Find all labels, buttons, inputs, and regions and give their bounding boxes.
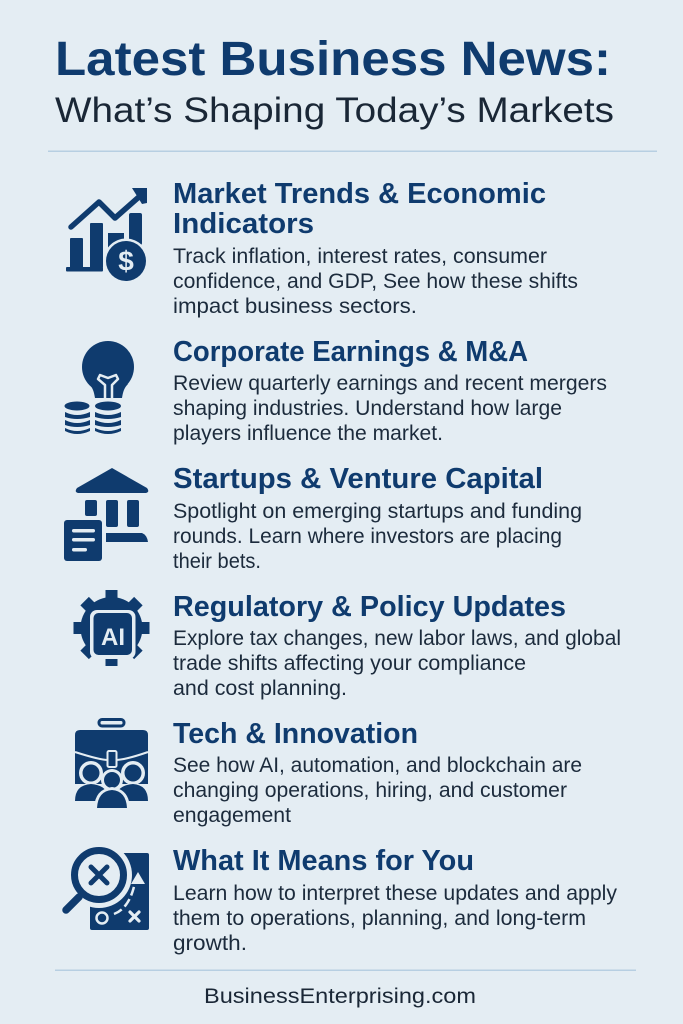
text block (173, 245, 578, 318)
text block: Spotlight on emerging startups and funding (173, 500, 582, 523)
text block: changing operations, hiring, and customer (173, 779, 567, 802)
text block (173, 627, 621, 700)
title: Latest Business News: (55, 33, 611, 86)
icon: AI gear: AI (101, 624, 125, 651)
text block: trade shifts affecting your compliance (173, 652, 526, 675)
text block: them to operations, planning, and long-term (173, 907, 586, 930)
text block: impact business sectors. (173, 295, 417, 318)
text block: Track inflation, interest rates, consumer (173, 245, 547, 268)
panel: market trends (66, 178, 578, 318)
text block: players influence the market. (173, 422, 443, 445)
text block: Learn how to interpret these updates and apply (173, 882, 617, 905)
icon: bank and document (64, 468, 148, 561)
heading: Indicators (173, 208, 314, 240)
panel: regulatory (74, 590, 621, 700)
panel: tech (70, 718, 582, 827)
icon: AI gear (74, 590, 150, 666)
icon: magnifier over strategy map (66, 842, 149, 930)
panel: what it means (66, 842, 617, 955)
panel: startups (64, 463, 582, 573)
icon: light bulb and coins (64, 341, 134, 434)
icon: briefcase with people (70, 720, 153, 808)
footer: website: BusinessEnterprising.com (204, 985, 476, 1008)
heading: Regulatory & Policy Updates (173, 591, 566, 623)
text block: their bets. (173, 550, 261, 573)
text block: See how AI, automation, and blockchain are (173, 754, 582, 777)
text block: and cost planning. (173, 677, 347, 700)
title: What’s Shaping Today’s Markets (55, 91, 614, 130)
heading: What It Means for You (173, 845, 474, 877)
text block (173, 500, 582, 573)
text block: engagement (173, 804, 291, 827)
heading (173, 178, 546, 240)
icon: bar chart with dollar coin (66, 188, 148, 284)
panel: corporate earnings (64, 336, 607, 445)
text block: rounds. Learn where investors are placing (173, 525, 562, 548)
text block (173, 882, 617, 955)
text block: growth. (173, 932, 247, 955)
heading: Startups & Venture Capital (173, 463, 543, 495)
heading: Market Trends & Economic (173, 178, 546, 210)
text block (173, 372, 607, 445)
text block: Explore tax changes, new labor laws, and global (173, 627, 621, 650)
text block: Review quarterly earnings and recent mergers (173, 372, 607, 395)
title (55, 33, 614, 130)
text block (173, 754, 582, 827)
text block: confidence, and GDP, See how these shifts (173, 270, 578, 293)
text block: shaping industries. Understand how large (173, 397, 562, 420)
icon: bar chart with dollar coin: $ (118, 246, 134, 276)
heading: Corporate Earnings & M&A (173, 336, 528, 368)
heading: Tech & Innovation (173, 718, 418, 750)
